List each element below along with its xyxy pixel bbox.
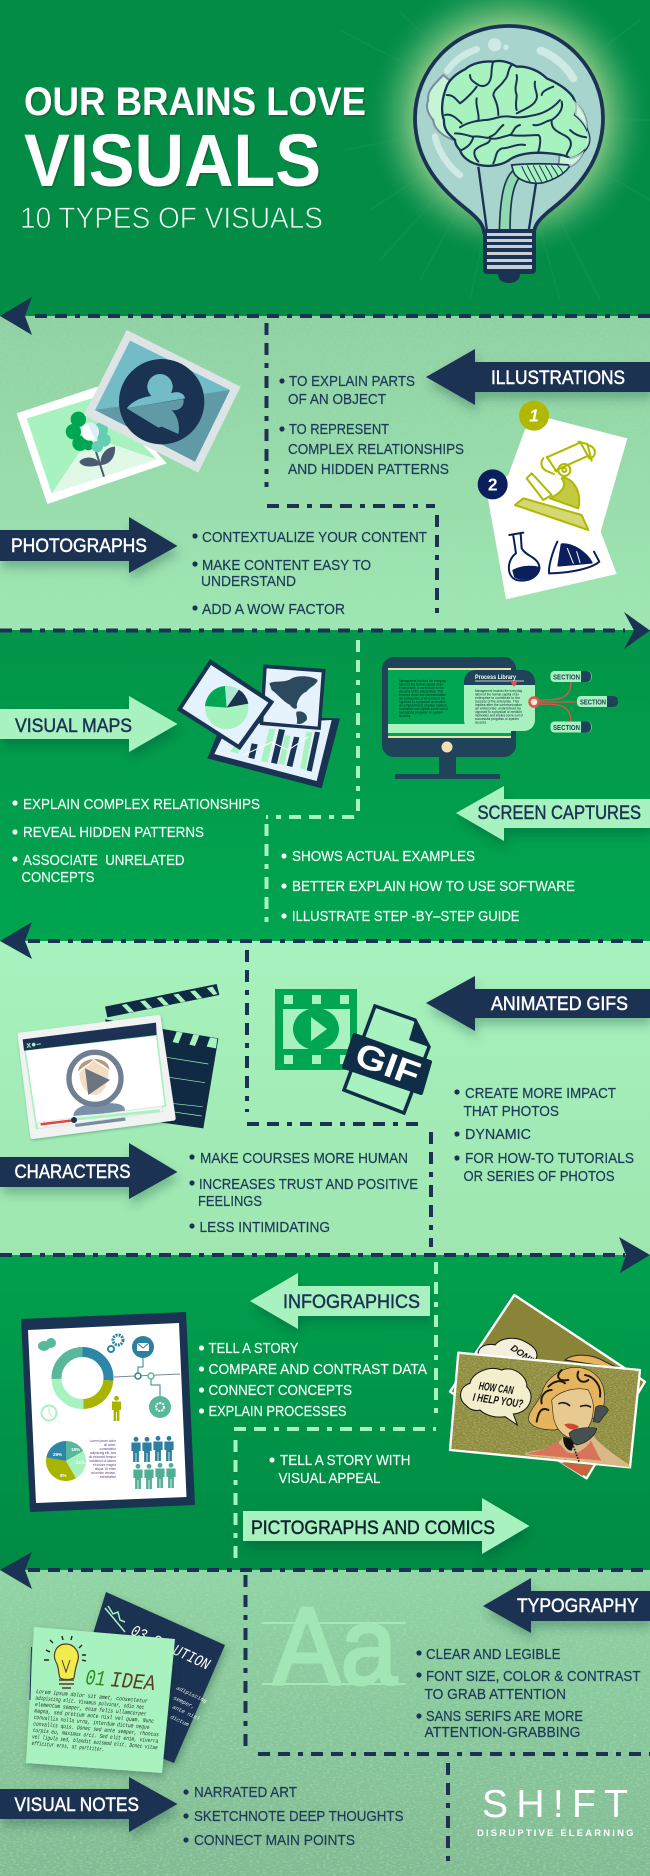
text block: typography bullets: CLEAR AND LEGIBLE — [426, 1646, 560, 1663]
text block: visual maps bullets: REVEAL HIDDEN PATTERNS — [23, 824, 204, 841]
woman eyes and lips — [558, 1403, 591, 1407]
screen text: success of the enterprises. This — [399, 690, 443, 694]
process library bubble: Process Library — [475, 674, 516, 681]
section pill 3: SECTION — [553, 725, 580, 732]
text block: pictographs bullet: TELL A STORY WITH — [280, 1452, 410, 1469]
pie chart: 31% — [76, 1460, 85, 1465]
purple tiny text: adipiscing elit, sed — [90, 1451, 116, 1455]
title — [24, 80, 366, 202]
screen text: successful progress or system — [399, 710, 443, 714]
arrow: visual maps — [0, 696, 178, 752]
glass highlights — [427, 38, 589, 233]
light rays — [340, 12, 650, 300]
number badge 1 — [519, 401, 549, 431]
section pill 1: SECTION — [553, 674, 580, 682]
process library bubble: success of the enterprise. This — [475, 700, 519, 704]
process library bubble: success. — [475, 720, 487, 724]
text block: visual maps bullets: CONCEPTS — [22, 869, 94, 886]
purple tiny text: ad minim veniam, — [91, 1471, 116, 1475]
arrow: characters: CHARACTERS — [14, 1162, 130, 1183]
pie chart — [46, 1441, 86, 1481]
icon: visual notes — [26, 1592, 225, 1773]
note body text — [31, 1688, 162, 1758]
process library bubble: an enterprise understood by — [475, 706, 521, 710]
text block: infographics bullets — [199, 1340, 427, 1420]
video window: x●– — [26, 1038, 42, 1050]
text block: characters bullets — [189, 1150, 418, 1236]
gif file: GIF — [350, 1036, 425, 1094]
monitor body — [382, 657, 516, 757]
brain wrinkles — [445, 62, 587, 163]
arrow: visual maps: VISUAL MAPS — [15, 716, 132, 737]
note body text: vel ligula sed, blandit euismod elit. Donec vitae — [32, 1733, 158, 1751]
back photo — [17, 387, 167, 504]
arrow: characters — [0, 1143, 178, 1199]
text block: illustrations bullets: TO EXPLAIN PARTS — [289, 373, 415, 390]
number badge 2 — [478, 469, 508, 499]
process library bubble: Management Involves the every'day — [475, 689, 522, 693]
icon: charts and maps — [177, 659, 340, 788]
arrow: pictographs and comics — [243, 1498, 530, 1554]
heading 01 idea: 01 — [84, 1666, 106, 1693]
process library bubble: motivation and implies some sort of — [475, 714, 523, 718]
screen text: an employment, implies system — [399, 704, 447, 708]
cerebellum — [512, 164, 570, 183]
text block: animated gifs bullets: CREATE MORE IMPACT — [465, 1085, 616, 1102]
text block: photographs bullets — [192, 529, 427, 618]
brain stem — [499, 168, 520, 233]
progress bar — [37, 1106, 163, 1129]
note body text: adipiscing elit. Vivamus pulvinar, odio nec — [35, 1694, 145, 1711]
text block: typography bullets: ATTENTION-GRABBING — [424, 1724, 580, 1741]
back note: adipiscing — [175, 1684, 209, 1705]
panel: header band — [0, 0, 650, 316]
woman hair strands — [537, 1370, 600, 1422]
pie chart: 18% — [71, 1447, 80, 1452]
text block: photographs bullets: MAKE CONTENT EASY TO — [202, 557, 371, 574]
text block: typography bullets: SANS SERIFS ARE MORE — [426, 1708, 583, 1725]
arrow: pictographs and comics: PICTOGRAPHS AND COMICS — [251, 1518, 495, 1539]
back note: dictum — [169, 1713, 191, 1728]
screen text: opposed to a physical or medium — [399, 700, 446, 704]
purple tiny text: aliqua. Ut enim — [95, 1467, 116, 1471]
text block: characters bullets: FEELINGS — [198, 1193, 262, 1210]
front comic — [448, 1350, 642, 1470]
purple tiny text: Lorem ipsum dolor — [90, 1439, 117, 1443]
text block: illustrations bullets: TO REPRESENT — [289, 421, 389, 438]
front photo — [84, 330, 241, 473]
purple tiny text: exercitation — [100, 1475, 116, 1479]
text block: typography bullets — [416, 1646, 640, 1741]
icon: infographic tablet — [21, 1312, 195, 1512]
section connectors — [530, 682, 577, 722]
back note: 03 SOLUTION — [128, 1622, 213, 1675]
icon: film strip and gif file — [275, 989, 430, 1113]
section pill 1 — [550, 671, 592, 682]
back comic: DON'T — [509, 1343, 539, 1368]
purple tiny text — [89, 1439, 117, 1479]
text block: pictographs bullet: VISUAL APPEAL — [278, 1470, 380, 1487]
bulb glass — [415, 26, 603, 232]
clapperboard — [105, 984, 219, 1128]
arrow: typography: TYPOGRAPHY — [517, 1596, 639, 1617]
text block: animated gifs bullets — [454, 1085, 634, 1185]
text block: visual maps bullets: ASSOCIATE UNRELATED — [23, 852, 185, 869]
translucent ghost overlay — [565, 100, 589, 167]
ghost brain outline — [427, 75, 477, 140]
text block: animated gifs bullets: OR SERIES OF PHOTOS — [464, 1168, 614, 1185]
film strip — [275, 989, 357, 1070]
beaker sketch — [549, 542, 599, 573]
gif file — [344, 1006, 430, 1113]
arrow: visual notes — [0, 1777, 178, 1832]
back note — [66, 1592, 225, 1763]
speech bubble — [461, 1369, 531, 1425]
section pill 2 — [577, 696, 618, 707]
text block: animated gifs bullets: FOR HOW-TO TUTORIALS — [465, 1150, 634, 1167]
woman shoulders — [525, 1433, 630, 1467]
heading 01 idea: IDEA — [109, 1668, 156, 1697]
process library bubble: opposed to a physical or medium — [475, 710, 522, 714]
icon: comics — [448, 1295, 645, 1478]
text block: visual notes bullets: CONNECT MAIN POINTS — [194, 1832, 355, 1849]
text block: infographics bullets: CONNECT CONCEPTS — [208, 1382, 352, 1399]
woman shadow neck — [563, 1437, 575, 1451]
panel: animated gifs and characters — [0, 941, 650, 1255]
woman dress — [525, 1441, 602, 1461]
text block: illustrations bullets: OF AN OBJECT — [288, 391, 386, 408]
icon: photographs — [17, 330, 241, 504]
arrow: animated gifs — [426, 976, 650, 1031]
text block: characters bullets: MAKE COURSES MORE HUMAN — [200, 1150, 408, 1167]
back note: semper, — [172, 1694, 196, 1711]
text block: photographs bullets: ADD A WOW FACTOR — [202, 601, 345, 618]
divider: section dashed lines — [0, 316, 650, 1570]
woman face — [552, 1389, 593, 1438]
video window — [20, 1017, 173, 1137]
number badge 2: 2 — [488, 475, 497, 495]
icon: typography aa: Aa — [273, 1585, 398, 1708]
text block: animated gifs bullets: THAT PHOTOS — [464, 1103, 559, 1120]
text block: screen captures bullets: ILLUSTRATE STEP -BY–STEP GUIDE — [292, 908, 520, 925]
note body text: convallis nulla urna, interdum dictum neque — [34, 1714, 150, 1731]
logo: shift disruptive elearning: SH!FT — [482, 1783, 628, 1826]
screen text: motivation and implies some sort of — [399, 707, 448, 711]
arrow: illustrations: ILLUSTRATIONS — [491, 368, 625, 389]
bulb glow — [364, 0, 650, 263]
arrow: screen captures — [456, 786, 650, 841]
section pill 2: SECTION — [580, 700, 606, 706]
text block: photographs bullets: UNDERSTAND — [201, 573, 296, 590]
pie chart card — [177, 659, 274, 750]
text block: illustrations bullets: COMPLEX RELATIONSHIPS — [288, 441, 464, 458]
text block: infographics bullets: EXPLAIN PROCESSES — [208, 1403, 346, 1420]
person in player — [73, 1103, 125, 1116]
subtitle: 10 TYPES OF VISUALS — [20, 202, 323, 235]
screen text: success. — [399, 714, 411, 718]
monitor stand — [439, 755, 456, 775]
bar chart card — [207, 715, 340, 788]
text block: characters bullets: INCREASES TRUST AND POSITIVE — [199, 1176, 418, 1193]
filament wires — [478, 167, 536, 233]
purple tiny text: sit amet, — [104, 1443, 116, 1447]
section pill 3 — [550, 722, 592, 732]
note body text: convallis quis. Donec sed ante semper, rhoncus — [33, 1720, 160, 1738]
text block: characters bullets: LESS INTIMIDATING — [200, 1219, 330, 1236]
bulb sketch icon — [44, 1636, 86, 1688]
flower — [66, 412, 115, 477]
portrait silhouette — [147, 374, 173, 399]
screen text: lation of the human capital of an — [399, 682, 443, 686]
screen text: enterprises' a contribute to the — [399, 686, 444, 690]
tablet icons — [38, 1335, 180, 1421]
process library bubble: implies after the communication — [475, 703, 522, 707]
icon: monitor screen capture — [382, 657, 618, 779]
icon: light bulb with brain — [415, 26, 603, 283]
donut chart — [56, 1352, 109, 1404]
text block: visual maps bullets: EXPLAIN COMPLEX RELATIONSHIPS — [23, 796, 260, 813]
panel: illustrations and photographs — [0, 316, 650, 630]
section pill 1: 1 — [584, 674, 588, 682]
screen text: involves chain and communication — [399, 693, 446, 697]
title line: our brains love: OUR BRAINS LOVE — [24, 80, 366, 124]
arrow: illustrations — [426, 349, 650, 405]
note body text: magna, sed pretium ante nisl vel quam. Nunc — [34, 1707, 155, 1725]
arrow: infographics: INFOGRAPHICS — [283, 1292, 420, 1313]
text block: screen captures bullets: BETTER EXPLAIN HOW TO USE SOFTWARE — [292, 878, 575, 895]
woman hair — [528, 1367, 605, 1430]
section pill 3: 3 — [584, 725, 588, 732]
arrow: photographs: PHOTOGRAPHS — [11, 536, 147, 557]
purple tiny text: et dolore magna — [93, 1463, 116, 1467]
screen text — [399, 679, 448, 718]
map card — [260, 664, 326, 730]
text block: infographics bullets: TELL A STORY — [208, 1340, 298, 1357]
note body text: efficitur eros, at porttitor. — [31, 1740, 105, 1753]
arrow: visual notes: VISUAL NOTES — [14, 1795, 139, 1816]
purple tiny text: incididunt ut labore — [89, 1459, 116, 1463]
pie chart: 29% — [53, 1452, 62, 1457]
logo: shift disruptive elearning: DISRUPTIVE ELEARNING — [477, 1828, 634, 1839]
text block: visual maps bullets — [12, 796, 260, 886]
note body text: Lorem ipsum dolor sit amet, consectetur — [36, 1688, 148, 1705]
text block: screen captures bullets: SHOWS ACTUAL EXAMPLES — [292, 848, 475, 865]
text block: visual notes bullets: NARRATED ART — [194, 1784, 297, 1801]
brain silhouette — [442, 61, 589, 166]
panel: visual maps and screen captures — [0, 630, 650, 941]
purple tiny text: consectetur — [100, 1447, 117, 1451]
microscope sketch — [515, 442, 595, 530]
number badge 1: 1 — [529, 406, 539, 426]
screen text: an enterprise environment be — [399, 696, 445, 700]
panel: typography and visual notes — [0, 1570, 650, 1876]
text block: photographs bullets: CONTEXTUALIZE YOUR CONTENT — [202, 529, 427, 546]
pie chart: 8% — [60, 1473, 67, 1478]
arrow: typography — [483, 1578, 650, 1633]
back note: ante nisl — [171, 1703, 201, 1722]
purple tiny text: do eiusmod tempor — [89, 1455, 117, 1459]
process library bubble: successful progress or system — [475, 717, 519, 721]
panel: infographics and pictographs — [0, 1255, 650, 1570]
text block: typography bullets: TO GRAB ATTENTION — [424, 1686, 566, 1703]
text block: screen captures bullets — [281, 848, 575, 925]
process library bubble — [464, 670, 535, 731]
text block: animated gifs bullets: DYNAMIC — [465, 1126, 531, 1143]
front comic: I HELP YOU? — [472, 1392, 524, 1411]
front note — [26, 1627, 175, 1773]
pictogram people — [131, 1436, 174, 1462]
screen text: Management Involves the everyday — [399, 679, 446, 683]
heading 01 idea — [84, 1666, 156, 1697]
icon: clapperboard and video window — [20, 984, 219, 1137]
arrow: photographs — [0, 517, 178, 573]
title line: visuals: VISUALS — [24, 119, 321, 202]
back comic — [450, 1295, 645, 1478]
telephone — [569, 1406, 608, 1445]
note body text: elementum semper, enim felis ullamcorper — [35, 1701, 147, 1718]
text block: illustrations bullets — [279, 373, 464, 478]
arrow: animated gifs: ANIMATED GIFS — [491, 994, 628, 1015]
pictogram people row 2 — [133, 1463, 176, 1489]
text block: pictographs bullet — [269, 1452, 410, 1487]
note body text: turpis eu, maximus orci. Sed elit enim, viverra — [32, 1727, 159, 1745]
section pill 2: 2 — [610, 700, 614, 706]
icon: illustration sheet — [478, 401, 627, 599]
flask sketch — [509, 533, 539, 581]
front comic: HOW CAN — [478, 1380, 515, 1397]
arrow: infographics — [250, 1273, 430, 1329]
text block: visual notes bullets: SKETCHNOTE DEEP THOUGHTS — [194, 1808, 404, 1825]
process library bubble: enterprise to contribute to the — [475, 696, 520, 700]
text block: infographics bullets: COMPARE AND CONTRAST DATA — [208, 1361, 427, 1378]
text block: illustrations bullets: AND HIDDEN PATTERNS — [288, 461, 449, 478]
text block: visual notes bullets — [183, 1784, 404, 1849]
screw base — [483, 229, 536, 274]
arrowheads: section dividers — [0, 297, 650, 1589]
process library bubble: lation of the human capital of an — [475, 692, 519, 696]
